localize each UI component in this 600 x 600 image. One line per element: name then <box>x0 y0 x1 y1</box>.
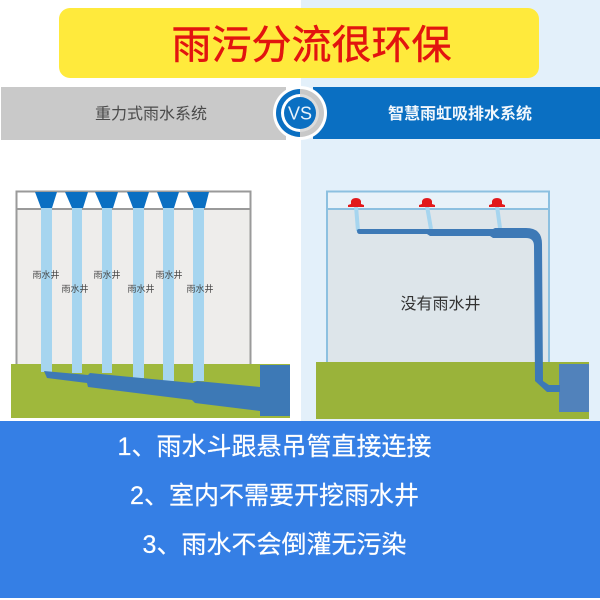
rain well labels: 雨水井 <box>61 283 89 294</box>
header bar: gravity system <box>1 87 286 140</box>
rain well labels: 雨水井 <box>32 269 60 280</box>
VS badge: VS <box>288 104 312 124</box>
no rain well label: 没有雨水井 <box>400 295 481 313</box>
roof outlets <box>348 198 505 207</box>
buried drain and tank <box>44 365 290 416</box>
ground <box>11 364 290 418</box>
header bar: siphonic system <box>313 87 600 139</box>
rain well labels: 雨水井 <box>186 283 214 294</box>
building section <box>327 192 549 363</box>
rainwater pipes <box>41 208 204 381</box>
ground <box>316 362 589 419</box>
benefit 3: 3、雨水不会倒灌无污染 <box>143 531 406 559</box>
benefit 2: 2、室内不需要开挖雨水井 <box>130 482 419 510</box>
diagram: gravity system <box>11 192 290 418</box>
tail pipes <box>356 206 500 231</box>
header bar: siphonic system: 智慧雨虹吸排水系统 <box>388 104 532 123</box>
benefit 1: 1、雨水斗跟悬吊管直接连接 <box>118 433 431 461</box>
benefits panel <box>0 421 600 598</box>
rain well labels <box>32 269 214 294</box>
VS badge <box>273 86 327 140</box>
rain well labels: 雨水井 <box>127 283 155 294</box>
building section <box>16 192 250 365</box>
tank <box>559 364 589 412</box>
title banner: 雨污分流很环保 <box>172 24 452 68</box>
roof funnels <box>35 192 209 208</box>
rain well labels: 雨水井 <box>93 269 121 280</box>
siphon main pipe <box>357 228 560 392</box>
header bar: gravity system: 重力式雨水系统 <box>95 105 207 123</box>
rain well labels: 雨水井 <box>155 269 183 280</box>
title banner <box>59 8 539 78</box>
diagram: siphonic system <box>316 192 589 419</box>
